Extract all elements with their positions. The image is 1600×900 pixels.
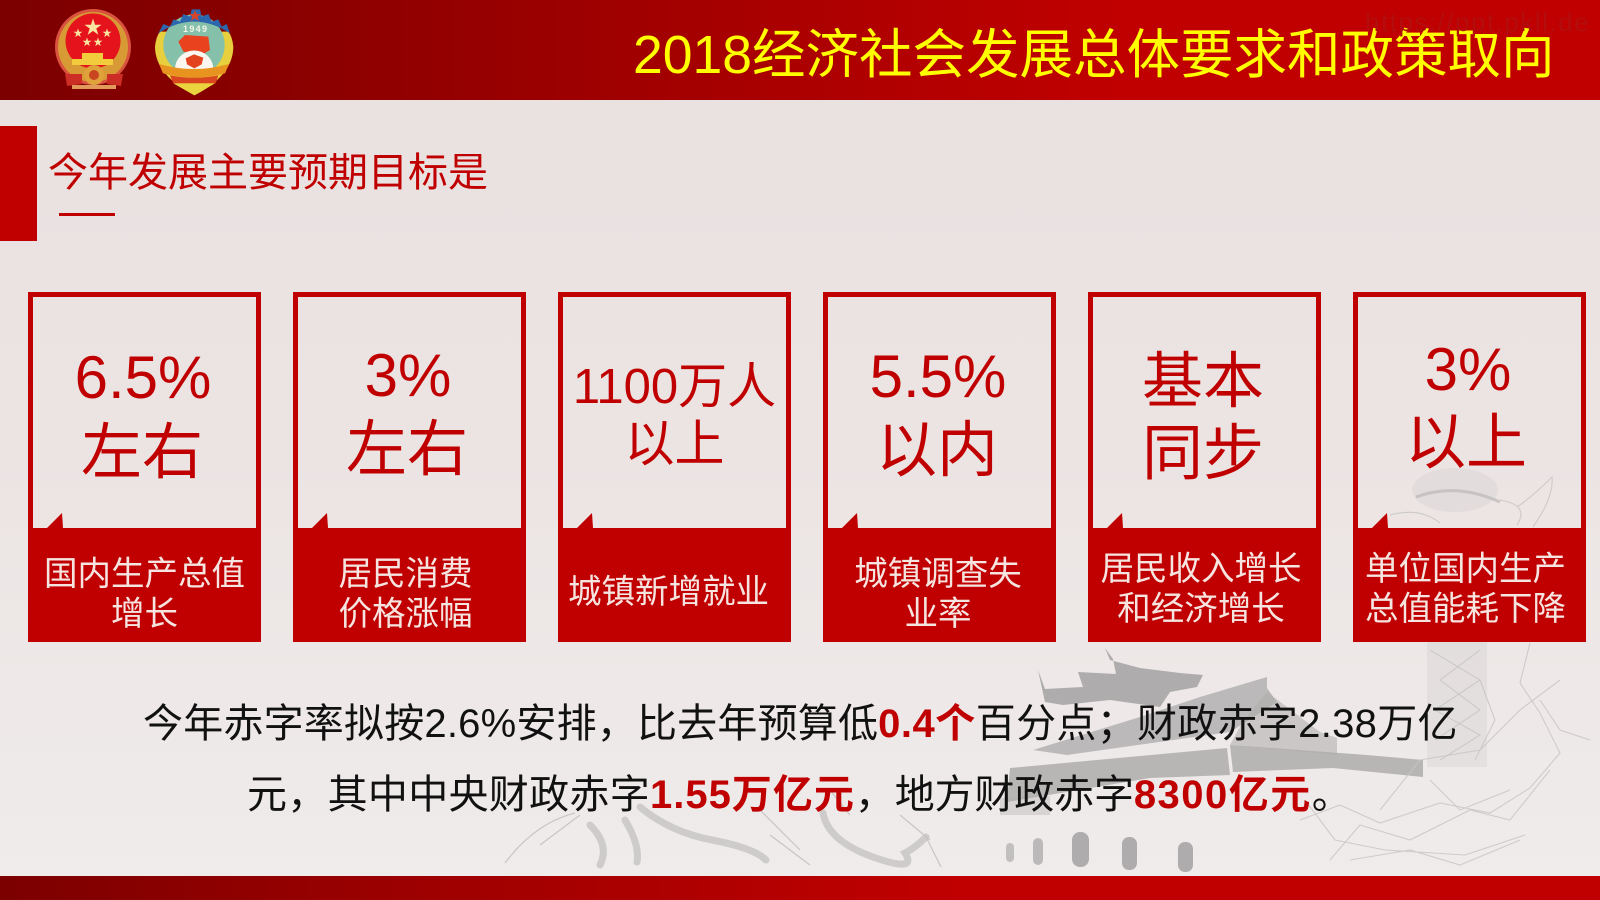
panel: unemployment: 以内 (876, 416, 998, 484)
panel: income: 和经济增长 (1117, 591, 1285, 628)
panel: unemployment (823, 292, 1056, 642)
panel: GDP growth: 国内生产总值 (44, 556, 245, 593)
panel: income: 基本 (1142, 347, 1264, 415)
panel: energy intensity: 3% (1425, 336, 1511, 403)
panel: urban jobs (558, 292, 791, 642)
panel: unemployment: 业率 (904, 596, 972, 633)
footer bar (0, 876, 1600, 900)
panel: urban jobs: 1100万人 (573, 360, 776, 414)
panel: GDP growth (28, 292, 261, 642)
panel: energy intensity: 总值能耗下降 (1365, 591, 1566, 628)
panel: CPI: 居民消费 (338, 556, 472, 593)
panel: income (1088, 292, 1321, 642)
watermark text: https://ppt.pkll.de (1365, 7, 1590, 37)
header bar (0, 0, 1600, 100)
panel: CPI: 价格涨幅 (338, 596, 472, 633)
panel: income: 居民收入增长 (1100, 551, 1302, 588)
panel: GDP growth: 左右 (81, 418, 203, 486)
section heading: 今年发展主要预期目标是 (48, 151, 488, 195)
panel: GDP growth: 6.5% (75, 344, 211, 411)
heading underline (59, 213, 115, 216)
panel: unemployment: 城镇调查失 (854, 556, 1022, 593)
icon: CPPCC emblem (154, 9, 234, 96)
icon: CPPCC emblem: 1949 (183, 24, 208, 34)
panel: energy intensity: 以上 (1405, 408, 1527, 476)
panel: unemployment: 5.5% (870, 343, 1006, 410)
deficit text: 元，其中中央财政赤字1.55万亿元，地方财政赤字8300亿元。 (247, 773, 1352, 817)
icon: national emblem (55, 9, 131, 89)
panel: urban jobs: 城镇新增就业 (568, 574, 769, 611)
panel: income: 同步 (1142, 419, 1264, 487)
deficit text (143, 702, 1458, 817)
panel: CPI (293, 292, 526, 642)
panel: CPI: 3% (365, 342, 451, 409)
deficit text: 今年赤字率拟按2.6%安排，比去年预算低0.4个百分点；财政赤字2.38万亿 (143, 702, 1458, 746)
title: 2018经济社会发展总体要求和政策取向 (633, 26, 1555, 85)
section marker tab (0, 126, 37, 241)
panel: energy intensity (1353, 292, 1586, 642)
panel: GDP growth: 增长 (111, 596, 178, 633)
panel: CPI: 左右 (346, 415, 468, 483)
panel: energy intensity: 单位国内生产 (1365, 551, 1566, 588)
panel: urban jobs: 以上 (624, 416, 724, 472)
